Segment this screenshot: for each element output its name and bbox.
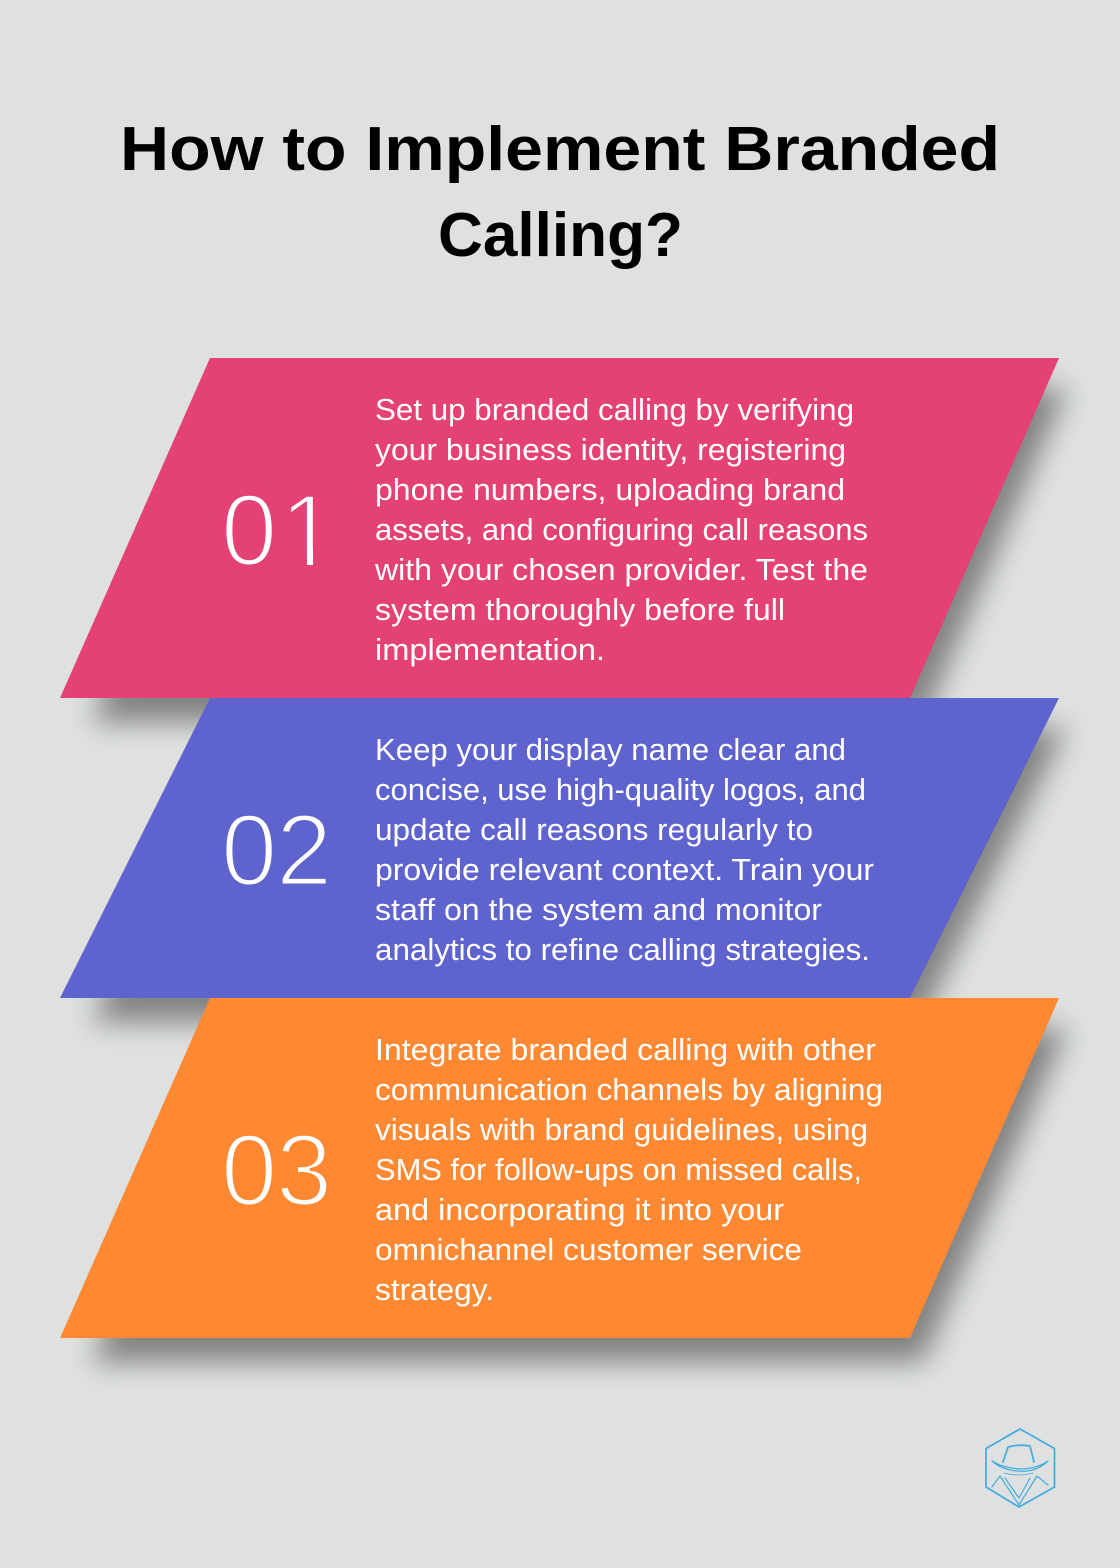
- step 1 text: with your chosen provider. Test the: [374, 553, 868, 587]
- panel 1 shadow: [92, 388, 1067, 722]
- title: [120, 115, 1000, 270]
- number 02: [221, 795, 332, 907]
- number 01: 1: [280, 475, 336, 587]
- step 1 text: phone numbers, uploading brand: [375, 473, 845, 507]
- step 1 text: your business identity, registering: [375, 433, 846, 467]
- step 3 text: visuals with brand guidelines, using: [375, 1113, 868, 1147]
- step 3 text: strategy.: [375, 1273, 494, 1307]
- step 1 text: implementation.: [375, 633, 605, 667]
- number 03: 3: [276, 1115, 332, 1227]
- icon: logo hexagon with spy hat: [986, 1429, 1054, 1507]
- number 01: [221, 475, 340, 587]
- panel 3 shape: [60, 998, 1059, 1338]
- panel 3 shadow: [92, 1028, 1067, 1362]
- panel: step 3: [60, 998, 1067, 1362]
- number 03: [221, 1115, 332, 1227]
- panel 1 shape: [60, 358, 1059, 698]
- step 3 text: Integrate branded calling with other: [375, 1033, 876, 1067]
- number 02: 2: [276, 795, 332, 907]
- step 3 text: SMS for follow-ups on missed calls,: [375, 1153, 862, 1187]
- title: How to Implement Branded: [120, 115, 1000, 184]
- step 3 text: communication channels by aligning: [375, 1073, 883, 1107]
- step 1 text: Set up branded calling by verifying: [375, 393, 854, 427]
- step 3 text: and incorporating it into your: [375, 1193, 784, 1227]
- step 2 text: Keep your display name clear and: [375, 733, 846, 767]
- step 2 text: provide relevant context. Train your: [375, 853, 874, 887]
- step 2 text: analytics to refine calling strategies.: [375, 933, 870, 967]
- step 2 text: staff on the system and monitor: [375, 893, 822, 927]
- panel: step 1: [60, 358, 1067, 722]
- step 1 text: system thoroughly before full: [375, 593, 785, 627]
- panel 2 shape: [60, 698, 1059, 998]
- step 1 text: [374, 393, 868, 667]
- step 3 text: omnichannel customer service: [375, 1233, 802, 1267]
- step 3 text: [375, 1033, 883, 1307]
- step 2 text: concise, use high-quality logos, and: [375, 773, 866, 807]
- panel 2 shadow: [92, 728, 1066, 1022]
- panel: step 2: [60, 698, 1066, 1022]
- number 01: 0: [221, 475, 277, 587]
- title: Calling?: [438, 201, 683, 270]
- step 1 text: assets, and configuring call reasons: [375, 513, 868, 547]
- number 02: 0: [221, 795, 277, 907]
- step 2 text: update call reasons regularly to: [375, 813, 813, 847]
- step 2 text: [375, 733, 874, 967]
- number 03: 0: [221, 1115, 277, 1227]
